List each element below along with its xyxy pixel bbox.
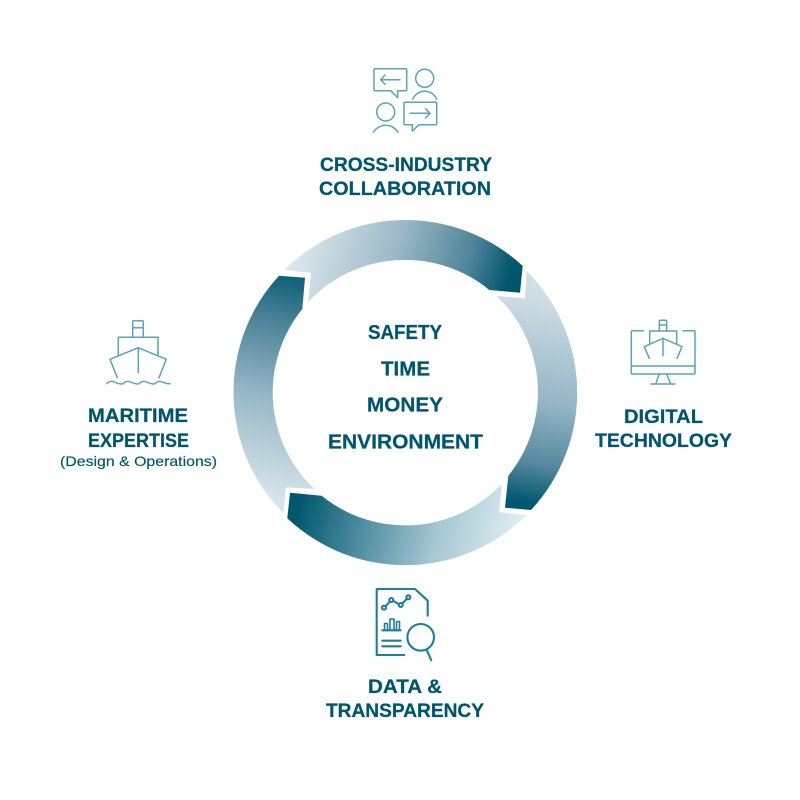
label: time: TIME <box>381 358 430 380</box>
icon: report with magnifier <box>377 589 434 660</box>
arrow: left segment <box>233 276 314 513</box>
heading: data and transparency: TRANSPARENCY <box>326 700 484 722</box>
label: safety: SAFETY <box>368 321 442 344</box>
heading: digital technology: TECHNOLOGY <box>595 430 732 452</box>
heading: maritime expertise <box>60 405 217 469</box>
label: environment: ENVIRONMENT <box>328 430 483 454</box>
icon: ship on waves <box>107 321 170 384</box>
heading: data and transparency <box>326 676 484 722</box>
arrow: bottom segment <box>287 484 527 565</box>
sublabel: design and operations: (Design & Operations) <box>60 453 217 469</box>
center text list <box>328 321 483 454</box>
heading: maritime expertise: MARITIME <box>88 405 188 427</box>
label: money: MONEY <box>367 394 443 416</box>
heading: digital technology <box>595 406 732 452</box>
heading: maritime expertise: EXPERTISE <box>88 430 189 452</box>
arrow: top segment <box>284 220 523 302</box>
heading: cross-industry collaboration: COLLABORATION <box>319 178 491 200</box>
heading: digital technology: DIGITAL <box>624 406 703 428</box>
heading: cross-industry collaboration <box>319 154 492 200</box>
heading: data and transparency: DATA & <box>368 676 442 698</box>
heading: cross-industry collaboration: CROSS-INDUSTRY <box>320 154 492 176</box>
arrow: right segment <box>497 271 577 510</box>
icon: collaboration people and speech bubbles <box>373 69 437 132</box>
icon: ship on monitor <box>631 320 695 384</box>
cycle ring of four arrows <box>233 220 577 565</box>
